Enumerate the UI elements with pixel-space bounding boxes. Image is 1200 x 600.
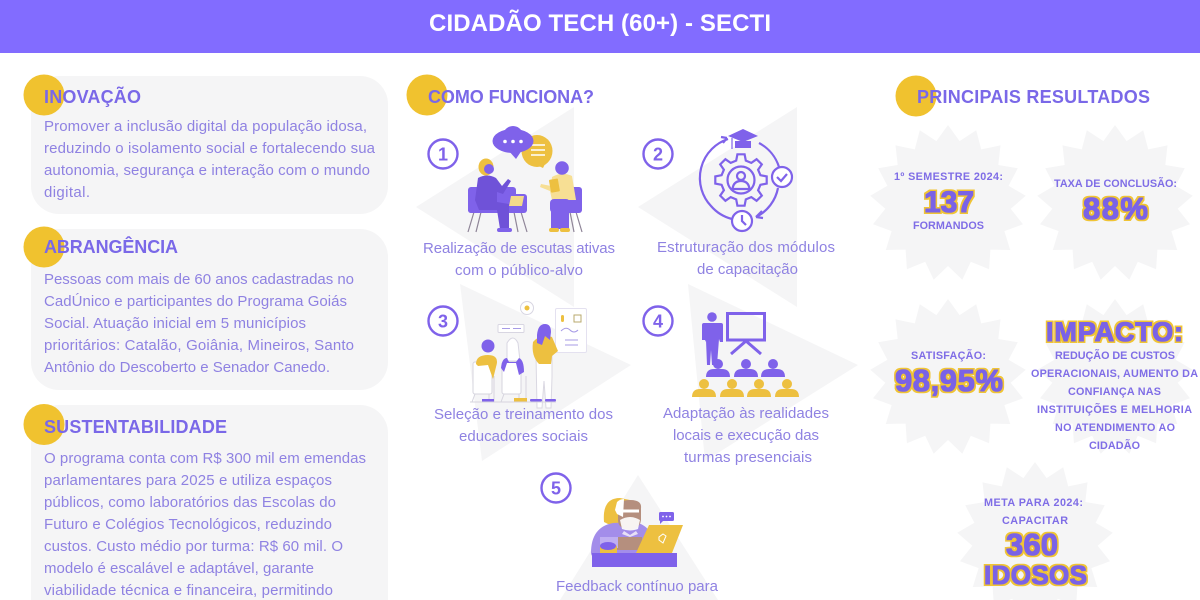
icon: gear, cap, check and clock cycle xyxy=(700,129,792,231)
caption step 4: turmas presenciais xyxy=(684,449,812,466)
step number 4: 4 xyxy=(653,312,663,332)
text block: sustentabilidade: parlamentares para 2025 e utiliza espaços xyxy=(44,472,332,489)
stat: 137 formandos: 1º SEMESTRE 2024: xyxy=(894,171,1003,183)
stat: 137 formandos xyxy=(870,125,1026,280)
text block: sustentabilidade: O programa conta com R$ 300 mil em emendas xyxy=(44,450,366,467)
caption step 1: com o público-alvo xyxy=(455,262,583,279)
step number 3 xyxy=(428,306,458,336)
text block: abrangência: Pessoas com mais de 60 anos cadastradas no xyxy=(44,271,354,288)
text block: inovação: Promover a inclusão digital da população idosa, xyxy=(44,118,367,135)
caption step 2: de capacitação xyxy=(697,261,798,278)
stat: impacto: OPERACIONAIS, AUMENTO DA xyxy=(1031,368,1198,380)
stat: taxa de conclusão 88% xyxy=(1037,125,1193,280)
stat: meta 360 idosos: IDOSOS xyxy=(984,560,1087,590)
stat: meta 360 idosos: META PARA 2024: xyxy=(984,497,1083,509)
caption step 3: Seleção e treinamento dos xyxy=(434,406,613,423)
stat: meta 360 idosos: 360 xyxy=(1006,527,1058,562)
text block: inovação: autonomia, segurança e interação com o mundo xyxy=(44,162,370,179)
title: CIDADÃO TECH (60+) - SECTI xyxy=(429,9,771,37)
caption step 3 xyxy=(434,406,613,445)
text block: abrangência: CadÚnico e participantes do Programa Goiás xyxy=(44,293,347,310)
text block: inovação xyxy=(44,118,376,201)
icon: presenter with audience xyxy=(692,312,799,397)
caption step 4: locais e execução das xyxy=(673,427,819,444)
text block: sustentabilidade: viabilidade técnica e financeira, permitindo xyxy=(44,582,333,599)
heading: sustentabilidade: SUSTENTABILIDADE xyxy=(44,417,227,437)
stat: meta 360 idosos: CAPACITAR xyxy=(1002,515,1068,527)
text block: abrangência xyxy=(44,271,354,376)
text block: inovação: digital. xyxy=(44,184,90,201)
stat: taxa de conclusão 88%: TAXA DE CONCLUSÃO: xyxy=(1054,177,1177,190)
panel: como funciona xyxy=(406,74,858,600)
text block: sustentabilidade: Futuro e Colégios Tecnológicos, reduzindo xyxy=(44,516,332,533)
text block: abrangência: prioritários: Catalão, Goiânia, Mineiros, Santo xyxy=(44,337,354,354)
header banner xyxy=(0,0,1200,53)
heading: inovação: INOVAÇÃO xyxy=(44,86,141,107)
text block: abrangência: Antônio do Descoberto e Senador Canedo. xyxy=(44,359,330,376)
stat: satisfação 98,95%: 98,95% xyxy=(895,363,1003,398)
heading: principais resultados: PRINCIPAIS RESULTADOS xyxy=(917,87,1150,107)
icon: conversation between two people xyxy=(468,126,582,232)
heading: como funciona: COMO FUNCIONA? xyxy=(428,87,594,107)
panel: principais resultados xyxy=(870,76,1198,600)
panel: sustentabilidade xyxy=(24,404,388,600)
stat: 137 formandos: 137 xyxy=(924,186,974,219)
panel: abrangência xyxy=(24,226,388,390)
text block: sustentabilidade: públicos, como laboratórios das Escolas do xyxy=(44,494,336,511)
stat: impacto: NO ATENDIMENTO AO xyxy=(1055,422,1175,434)
step number 4 xyxy=(644,306,672,336)
text block: sustentabilidade xyxy=(44,450,366,599)
caption step 5: Feedback contínuo para xyxy=(556,578,719,595)
step number 2 xyxy=(644,140,672,168)
heading: abrangência: ABRANGÊNCIA xyxy=(44,236,178,257)
step number 1 xyxy=(428,140,458,168)
step number 5 xyxy=(542,474,570,502)
stat: impacto xyxy=(1031,299,1198,454)
text block: sustentabilidade: modelo é escalável e adaptável, garante xyxy=(44,560,314,577)
step number 2: 2 xyxy=(653,144,663,164)
icon: educators training xyxy=(470,302,586,408)
panel: inovação xyxy=(24,74,388,214)
background triangles xyxy=(416,107,858,600)
text block: sustentabilidade: custos. Custo médio por turma: R$ 60 mil. O xyxy=(44,538,343,555)
stat: impacto: CONFIANÇA NAS xyxy=(1068,386,1161,398)
stat: satisfação 98,95%: SATISFAÇÃO: xyxy=(911,349,986,362)
step number 5: 5 xyxy=(551,478,561,498)
text block: inovação: reduzindo o isolamento social e fortalecendo sua xyxy=(44,140,376,157)
stat: impacto: CIDADÃO xyxy=(1089,439,1140,452)
caption step 4 xyxy=(663,405,829,466)
icon: older man using a laptop xyxy=(591,498,683,567)
caption step 1 xyxy=(423,240,615,279)
step number 1: 1 xyxy=(438,144,448,164)
caption step 1: Realização de escutas ativas xyxy=(423,240,615,257)
step number 3: 3 xyxy=(438,312,448,332)
stat: taxa de conclusão 88%: 88% xyxy=(1083,191,1148,226)
caption step 4: Adaptação às realidades xyxy=(663,405,829,422)
caption step 3: educadores sociais xyxy=(459,428,588,445)
stat: 137 formandos: FORMANDOS xyxy=(913,220,984,232)
caption step 2: Estruturação dos módulos xyxy=(657,239,835,256)
stat: impacto: IMPACTO: xyxy=(1046,317,1183,347)
text block: abrangência: Social. Atuação inicial em 5 municípios xyxy=(44,315,306,332)
stat: satisfação 98,95% xyxy=(870,299,1026,454)
stat: impacto: REDUÇÃO DE CUSTOS xyxy=(1055,349,1175,362)
stat: impacto: INSTITUIÇÕES E MELHORIA xyxy=(1037,403,1192,416)
stat: meta 360 idosos xyxy=(957,462,1113,600)
caption step 2 xyxy=(657,239,835,278)
